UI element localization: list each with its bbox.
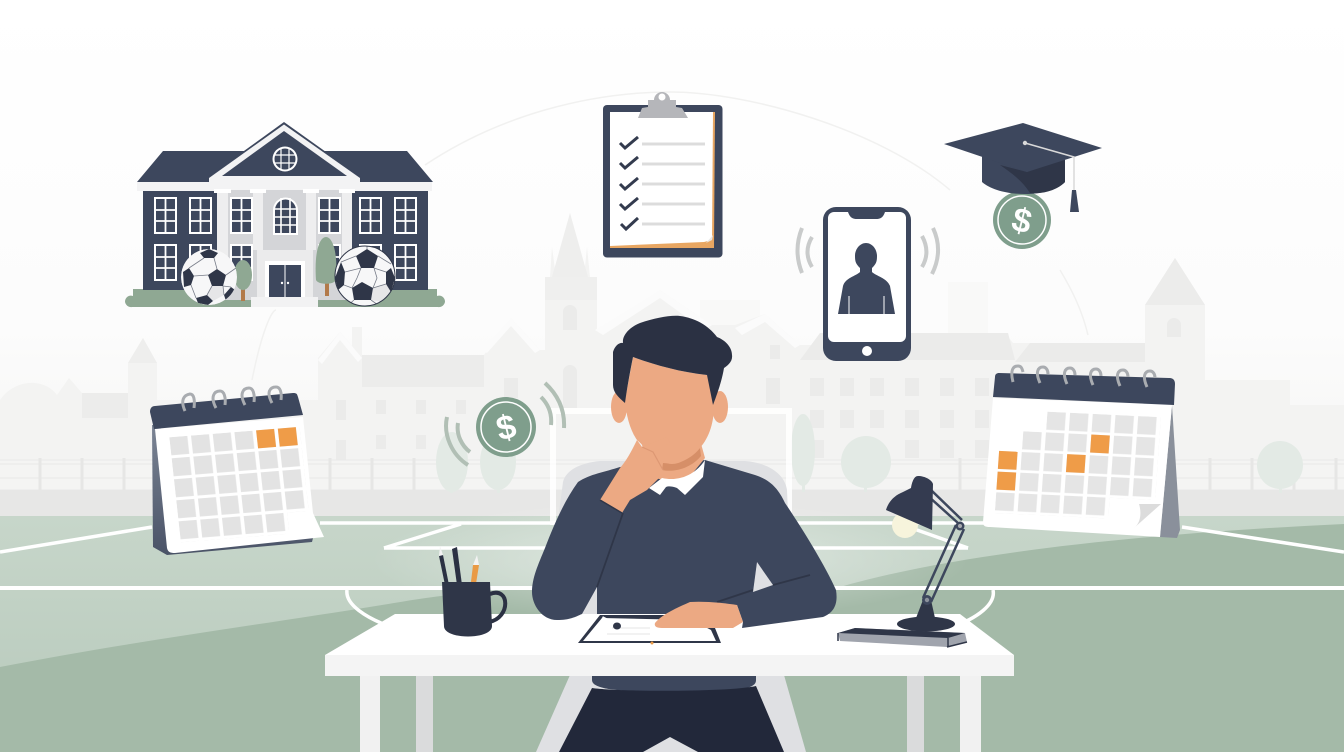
arm — [923, 490, 964, 602]
fence and ground band — [0, 458, 1344, 516]
desk lamp on book — [838, 476, 967, 647]
calendar cells — [995, 410, 1161, 521]
school building — [125, 122, 445, 307]
mug with pens — [439, 546, 505, 636]
legs — [559, 670, 784, 752]
soccer ball right — [335, 244, 395, 306]
clipboard checklist — [603, 92, 722, 258]
small trees — [241, 285, 245, 301]
columns — [217, 192, 352, 290]
shade — [886, 476, 933, 530]
chair — [536, 461, 806, 752]
entrance — [257, 250, 313, 300]
book — [838, 628, 967, 647]
soccer field — [0, 500, 1344, 752]
open notebook — [578, 615, 721, 644]
thin connector arc — [252, 92, 1088, 380]
person — [532, 316, 837, 628]
hand on book — [655, 602, 743, 628]
binding rings — [1012, 366, 1155, 387]
page curl — [1134, 504, 1161, 528]
desk — [325, 614, 1014, 752]
round window — [272, 146, 298, 172]
glow — [892, 512, 918, 538]
floating dollar coin with waves: $ — [492, 407, 520, 449]
smartphone with silhouette — [798, 207, 938, 361]
floating dollar coin with waves — [446, 383, 564, 465]
pediment — [208, 122, 361, 177]
graduation cap with dollar coin — [944, 123, 1102, 249]
lawn — [125, 289, 445, 307]
sleeve lines — [597, 513, 810, 602]
silhouette — [838, 243, 895, 314]
right calendar — [983, 366, 1180, 538]
goal frame — [553, 411, 789, 525]
binding rings — [183, 387, 281, 411]
cuff — [600, 500, 622, 513]
face — [625, 357, 714, 464]
base — [897, 616, 955, 632]
calendar cells — [169, 427, 311, 542]
windows — [154, 197, 177, 234]
graduation cap with dollar coin: $ — [1008, 200, 1036, 242]
background trees — [436, 414, 1303, 493]
collar — [649, 460, 705, 495]
sweater — [532, 460, 837, 628]
left calendar — [150, 387, 324, 555]
neck — [640, 440, 705, 482]
soccer ball left — [181, 249, 237, 305]
hand on chin — [600, 437, 670, 513]
gap between arm and torso — [753, 562, 773, 592]
background sky — [0, 0, 1344, 500]
signal waves — [798, 228, 938, 274]
arched window — [273, 197, 298, 235]
hair — [613, 316, 732, 405]
background skyline of campus — [0, 213, 1344, 462]
ears — [611, 391, 627, 423]
